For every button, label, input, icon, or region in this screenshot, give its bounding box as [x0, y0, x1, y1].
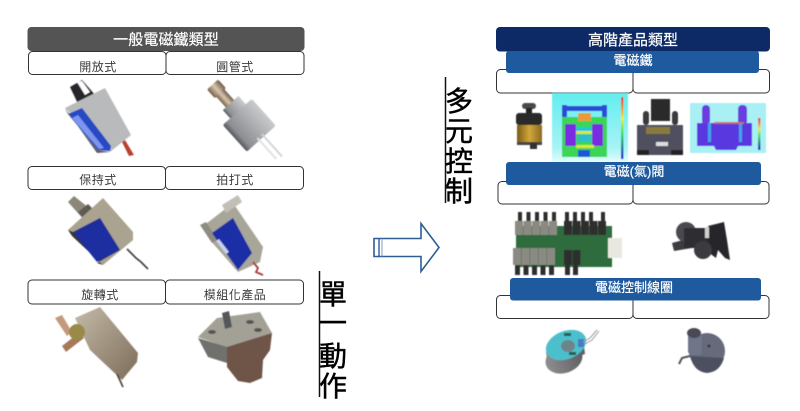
vertical text: multi control: 多 [445, 86, 473, 117]
icon: coil pump [679, 328, 725, 373]
label: tubular type [166, 52, 304, 74]
panel: general electromagnet types [28, 27, 347, 402]
heading: advanced product types: 高階產品類型 [588, 32, 678, 49]
label: open type: 開放式 [79, 59, 117, 74]
vertical text: multi control: 元 [445, 116, 473, 147]
label: holding type [28, 166, 166, 190]
sub-heading: electromagnetic control coil: 電磁控制線圈 [595, 280, 673, 295]
sub-heading: electromagnet: 電磁鐵 [613, 53, 653, 68]
sub-heading: electromagnet [506, 51, 759, 73]
heading: advanced product types [496, 27, 770, 52]
label boxes: electromagnet row [496, 70, 770, 93]
icon: tubular solenoid [198, 71, 294, 172]
sub-heading: electromagnetic control coil [510, 278, 761, 300]
label: tubular type: 圓管式 [216, 59, 254, 74]
label: modular products [166, 280, 304, 304]
label: clapper type [166, 166, 304, 190]
label: open type [28, 52, 166, 74]
heading: general types [28, 27, 304, 51]
label boxes: control coil row [496, 296, 769, 318]
label: rotary type: 旋轉式 [81, 288, 119, 302]
icon: pneumatic valve [672, 222, 730, 260]
chart: magnetic field simulation 2 [690, 103, 766, 153]
vertical text: single action: 一 [319, 308, 347, 339]
label boxes: valve row [498, 182, 769, 204]
chart: magnetic field simulation 1 [552, 93, 628, 162]
label: modular products: 模組化產品 [204, 287, 266, 302]
label: holding type: 保持式 [79, 172, 117, 187]
heading: general types: 一般電磁鐵類型 [113, 32, 219, 48]
arrow: toward advanced products [374, 224, 439, 272]
icon: electromagnet assembly [637, 99, 683, 155]
vertical text: single action: 作 [319, 371, 347, 402]
icon: rotary solenoid [55, 307, 138, 387]
sub-heading: solenoid valve: 電磁(氣)閥 [604, 164, 664, 179]
vertical text: multi control: 控 [445, 146, 473, 177]
panel: advanced product types [496, 27, 770, 379]
vertical text: single action [319, 271, 347, 402]
icon: plunger coil [516, 103, 542, 149]
label: clapper type: 拍打式 [216, 172, 254, 187]
icon: modular product [198, 311, 272, 383]
icon: open type solenoid [65, 80, 134, 156]
vertical text: single action: 單 [319, 279, 347, 310]
vertical text: single action: 動 [319, 341, 347, 372]
label: rotary type [28, 280, 166, 304]
vertical text: multi control: 制 [445, 176, 473, 207]
vertical text: multi control [445, 77, 473, 207]
icon: holding solenoid [68, 196, 148, 269]
icon: valve circuit board [513, 212, 622, 275]
icon: clapper solenoid [200, 195, 263, 275]
sub-heading: solenoid valve [506, 162, 761, 185]
icon: ring coil [541, 324, 599, 379]
